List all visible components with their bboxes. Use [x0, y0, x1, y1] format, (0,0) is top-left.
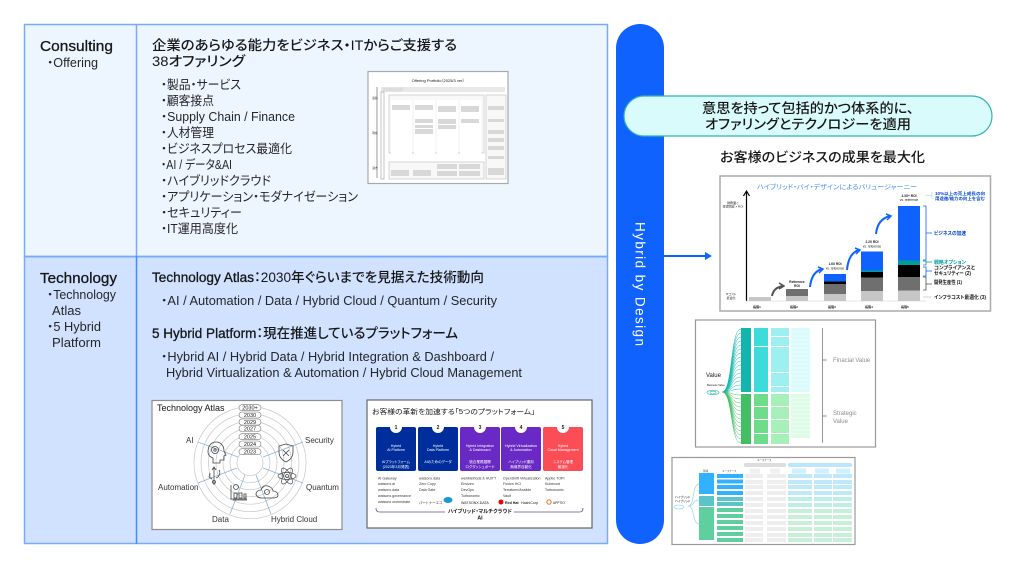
- bar value labels: 1.6X ROI: [828, 262, 842, 266]
- callout: apply offerings and technology: オファリングとテクノロジーを適用: [705, 116, 911, 132]
- icon: quantum atom: [278, 466, 296, 486]
- platform product lists: watsonx.data: [419, 476, 440, 480]
- platform card 3: 統合業務展開: [469, 459, 491, 464]
- platform card 4: Hybrid Virtualization: [505, 444, 537, 448]
- platform card 4: & Automation: [510, 448, 532, 452]
- atlas title: Technology Atlas: [157, 403, 225, 413]
- technology heading: Technology: [40, 270, 118, 287]
- fan connectors: [722, 329, 741, 443]
- chart title: ハイブリッド・バイ・デザインによるバリュージャーニー: [757, 182, 917, 191]
- x axis labels: 段階5: [901, 304, 909, 309]
- platform card 2: Data Platform: [427, 448, 449, 452]
- stacked bars: [746, 206, 926, 301]
- atlas category labels: Security: [305, 436, 334, 445]
- value legend: 戦略オプション: [934, 259, 966, 266]
- platform card 5: 最適化: [558, 464, 569, 469]
- technology sub labels: Atlas: [52, 304, 81, 318]
- bar value labels: [789, 194, 918, 288]
- hybrid multi cloud bracket: ハイブリッド・マルチクラウド: [448, 507, 512, 515]
- platform card 3: ログダッシュボード: [465, 464, 495, 469]
- platform card 2: 2: [437, 425, 440, 431]
- platform card 3: 3: [479, 425, 482, 431]
- technology sub labels: ・Technology: [47, 288, 117, 302]
- value label: Business Value: [707, 383, 725, 387]
- hybrid platform list: [161, 350, 523, 380]
- platform card 3: [460, 421, 500, 471]
- offering portfolio thumbnail: 過去: [372, 166, 378, 170]
- platform product lists: watsonx.orchestrate: [378, 500, 410, 504]
- bar value labels: ROI: [794, 284, 800, 288]
- platform product lists: watsonx.data: [378, 488, 399, 492]
- value tree thumbnail: [696, 320, 876, 447]
- platform product lists: APPTIO: [553, 501, 565, 505]
- value legend: 用途進/能力の向上を含む: [935, 195, 985, 202]
- consulting title: 企業のあらゆる能力をビジネス・ITからご支援する: [152, 37, 457, 53]
- y axis: 財務面と: [727, 200, 739, 205]
- y axis: ITコスト: [726, 291, 737, 296]
- matrix source label: ハイブリッド: [675, 494, 691, 499]
- matrix source label: ハイブリッド: [675, 498, 691, 503]
- matrix left blocks: [699, 473, 714, 540]
- platforms title: お客様の革新を加速する「5つのプラットフォーム」: [372, 407, 535, 416]
- hybrid multi cloud bracket: [376, 507, 583, 522]
- matrix headers: ユースケース: [722, 469, 737, 473]
- technology sub labels: ・5 Hybrid: [47, 320, 101, 334]
- growth arrows: [772, 214, 891, 296]
- platform card 5: システム管理: [553, 459, 574, 464]
- matrix rows: [717, 474, 852, 542]
- platform product lists: Terraform/Ansible: [503, 488, 531, 492]
- atlas year labels: 2025: [244, 435, 256, 441]
- platform card 3: Hybrid Integration: [466, 444, 494, 448]
- x axis labels: 段階1: [753, 304, 761, 309]
- platform product lists: Red Hat: [505, 501, 519, 505]
- matrix headers: [703, 463, 852, 474]
- platform product lists: [378, 476, 565, 505]
- hybrid platform list: Hybrid Virtualization & Automation / Hybrid Cloud Management: [166, 366, 523, 380]
- platform product lists: AI Gateway: [378, 476, 397, 480]
- value legend: 10%以上の売上成長の向: [935, 190, 985, 197]
- platform card 2: [418, 421, 458, 471]
- platform product lists: Fusion HCI: [503, 482, 521, 486]
- platform product lists: Turbonomic: [545, 488, 564, 492]
- atlas year labels: 2024: [244, 442, 256, 448]
- technology atlas list: ・AI / Automation / Data / Hybrid Cloud / Quantum / Security: [161, 294, 498, 308]
- offering portfolio thumbnail: 現在: [372, 131, 378, 135]
- y axis: 最適化: [726, 295, 736, 300]
- x axis labels: 段階4: [865, 304, 873, 309]
- platform product lists: Apptio TOPI: [545, 476, 564, 480]
- platform product lists: パートナーエコ: [419, 500, 443, 505]
- platform card 3: & Dashboard: [470, 448, 490, 452]
- platform card 5: Hybrid: [558, 444, 568, 448]
- value legend: ビジネスの加速: [934, 230, 966, 237]
- platform product lists: HashiCorp: [521, 501, 538, 505]
- panel: technology: [24, 256, 608, 544]
- value label: Value: [706, 373, 722, 379]
- value label: [706, 373, 725, 395]
- technology sub labels: [47, 288, 117, 350]
- value side labels: [822, 328, 871, 443]
- platform product lists: DevOps: [461, 488, 474, 492]
- hybrid platform list: ・Hybrid AI / Hybrid Data / Hybrid Integration & Dashboard /: [161, 350, 495, 364]
- platform product lists: webMethods & HUiTT: [461, 476, 497, 480]
- value journey chart: [720, 176, 990, 311]
- offering list: ・IT運用高度化: [161, 221, 238, 236]
- atlas category labels: AI: [186, 436, 194, 445]
- value tree columns: [741, 328, 810, 444]
- hybrid multi cloud bracket: AI: [477, 516, 483, 522]
- technology atlas heading: Technology Atlas：2030年ぐらいまでを見据えた技術動向: [152, 269, 484, 285]
- value legend: 開発生産性 (1): [934, 279, 962, 286]
- atlas year labels: [239, 405, 261, 456]
- platform product lists: WATSONX.DATA: [461, 501, 489, 505]
- platform card 5: Cloud Management: [547, 448, 579, 452]
- offering portfolio thumbnail: Offering Portfolio（2025/3 ver）: [412, 78, 464, 83]
- atlas category labels: Automation: [158, 483, 198, 492]
- platform card 2: AIのためのデータ: [424, 459, 452, 464]
- offering list: ・人材管理: [161, 125, 214, 140]
- offering list: ・Supply Chain / Finance: [161, 110, 295, 124]
- platform product lists: Data Gate: [419, 488, 435, 492]
- offering portfolio thumbnail: [368, 72, 508, 184]
- value side labels: Finacial Value: [833, 358, 871, 364]
- platform card 4: ハイブリッド運用: [508, 459, 534, 464]
- platform card 4: 4: [520, 425, 523, 431]
- bar value labels: Reference: [789, 280, 805, 284]
- value legend: セキュリティー (2): [934, 271, 971, 277]
- value legend: [923, 190, 986, 301]
- platform product lists: Envizeo: [461, 482, 474, 486]
- platform product lists: Vault: [503, 494, 511, 498]
- icon: automation: [209, 467, 220, 485]
- value legend: コンプライアンスと: [934, 264, 976, 272]
- atlas category labels: Quantum: [306, 483, 339, 492]
- consulting title: 38オファリング: [152, 53, 247, 69]
- matrix source label: [674, 484, 699, 524]
- bar value labels: 2.2X ROI: [865, 240, 879, 244]
- offering list: ・製品・サービス: [161, 78, 241, 92]
- atlas year labels: 2027: [244, 426, 256, 432]
- x axis labels: [753, 304, 909, 309]
- callout: apply offerings and technology: 意思を持って包括的かつ体系的に、: [702, 100, 914, 116]
- offering list: ・ハイブリッドクラウド: [161, 173, 271, 188]
- platform product lists: Zero Copy: [419, 482, 436, 486]
- value matrix thumbnail: ユースケース: [757, 458, 772, 462]
- consulting sub label: ・Offering: [47, 56, 98, 70]
- value matrix thumbnail: [672, 458, 855, 544]
- platform card 1: [376, 421, 416, 471]
- platform product lists: watsonx.ai: [378, 482, 395, 486]
- offering list: [161, 78, 358, 236]
- atlas category labels: [158, 436, 339, 524]
- offering list: ・アプリケーション・モダナイゼーション: [161, 189, 358, 204]
- bar value labels: vs. reference: [900, 198, 918, 202]
- platform product lists: Turbonomic: [461, 494, 480, 498]
- platform card 4: 無境界自動化: [510, 464, 532, 469]
- y axis: [723, 191, 750, 301]
- icon: security shield: [279, 444, 293, 462]
- atlas category labels: Hybrid Cloud: [271, 515, 317, 524]
- consulting heading: Consulting: [40, 38, 113, 55]
- bar value labels: 3.3X+ ROI: [902, 194, 917, 198]
- platform card 5: [543, 421, 583, 471]
- atlas category labels: Data: [212, 515, 229, 524]
- bar value labels: vs. reference: [826, 266, 844, 270]
- x axis labels: 段階2: [790, 304, 798, 309]
- platform card 4: [501, 421, 541, 471]
- offering portfolio thumbnail: 最新: [372, 96, 378, 100]
- value legend: インフラコスト最適化 (3): [934, 294, 986, 301]
- platform card 5: 5: [562, 425, 565, 431]
- icon: AI head: [208, 442, 226, 463]
- pill: hybrid by design: [616, 24, 664, 544]
- platform product lists: Kubecost: [545, 482, 560, 486]
- consulting title: [152, 37, 457, 69]
- heading: maximize business outcomes: お客様のビジネスの成果を最大化: [720, 149, 926, 165]
- matrix headers: 領域: [703, 469, 709, 473]
- offering list: ・AI / データ&AI: [161, 157, 232, 172]
- hybrid platform heading: 5 Hybrid Platform：現在推進しているプラットフォーム: [152, 325, 458, 341]
- pill: hybrid by design: Hybrid by Design: [632, 222, 648, 346]
- atlas year labels: 2029: [244, 420, 256, 426]
- platform product lists: watsonx.governance: [378, 494, 411, 498]
- offering list: ・ビジネスプロセス最適化: [161, 142, 292, 156]
- atlas year labels: 2023: [244, 450, 256, 456]
- five platforms thumbnail: [367, 400, 592, 528]
- platform card 1: 1: [395, 425, 398, 431]
- y axis: 投資回収 × ROI: [723, 204, 744, 208]
- platform card 1: AI Platform: [387, 448, 405, 452]
- platform card 1: AIプラットフォーム: [382, 459, 411, 464]
- panel: consulting: [24, 24, 608, 256]
- callout: apply offerings and technology: [624, 96, 992, 136]
- offering list: ・顧客接点: [161, 93, 214, 108]
- platform card 1: Hybrid: [391, 444, 401, 448]
- value side labels: Value: [833, 419, 849, 425]
- platform card 1: (2023年3月発表): [383, 464, 409, 469]
- platform product lists: OpenShift Virtualization: [503, 476, 540, 480]
- x axis labels: 段階3: [828, 304, 836, 309]
- arrow: to outcomes: [664, 252, 712, 260]
- value side labels: Strategic: [833, 411, 857, 417]
- icon: data: [231, 484, 247, 500]
- offering list: ・セキュリティー: [161, 206, 242, 220]
- icon: hybrid cloud: [256, 486, 278, 498]
- atlas year labels: 2030+: [242, 406, 258, 412]
- bar value labels: vs. reference: [863, 244, 881, 248]
- technology sub labels: Platform: [52, 336, 101, 350]
- technology atlas radar: [152, 400, 342, 530]
- platform card 2: Hybrid: [433, 444, 443, 448]
- atlas year labels: 2030: [244, 413, 256, 419]
